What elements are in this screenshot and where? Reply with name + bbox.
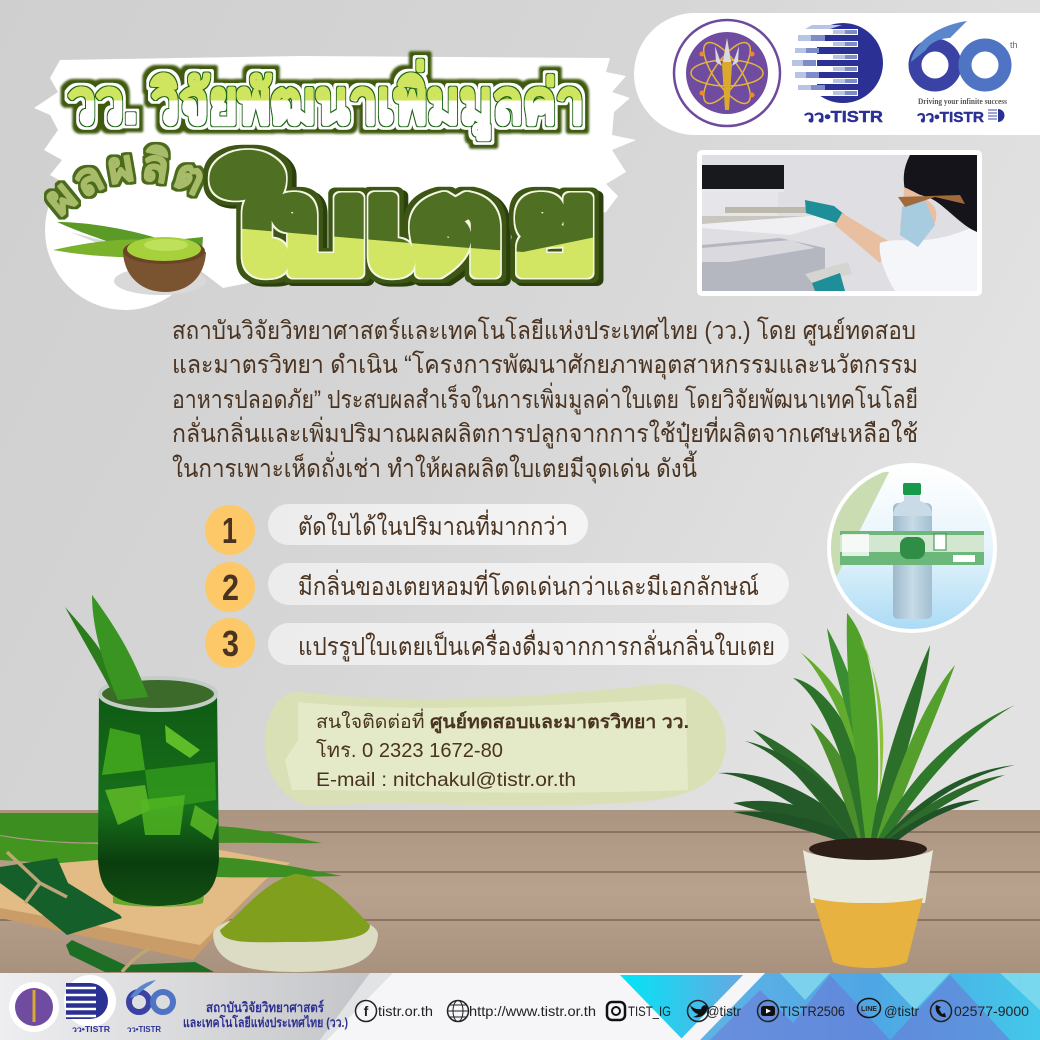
footer bar bbox=[0, 973, 1040, 1040]
list item 1 bbox=[205, 504, 588, 555]
logo: TISTR: วว•TISTR bbox=[804, 109, 883, 126]
logo: 60th anniversary bbox=[911, 21, 1018, 126]
bowl of pandan powder bbox=[213, 874, 378, 972]
wooden table bbox=[0, 810, 1040, 973]
footer contact items bbox=[356, 998, 1029, 1022]
footer bar: วว•TISTR bbox=[127, 1025, 161, 1034]
body paragraph: สถาบันวิจัยวิทยาศาสตร์และเทคโนโลยีแห่งประเทศไทย (วว.) โดย ศูนย์ทดสอบ bbox=[172, 316, 916, 346]
logo: TISTR bbox=[790, 20, 883, 126]
body paragraph: ในการเพาะเห็ดถั่งเช่า ทำให้ผลผลิตใบเตยมีจุดเด่น ดังนี้ bbox=[172, 450, 697, 484]
contact panel: E-mail : nitchakul@tistr.or.th bbox=[316, 770, 576, 791]
white circle behind product illustration bbox=[45, 150, 205, 310]
body paragraph: กลั่นกลิ่นและเพิ่มปริมาณผลผลิตการปลูกจากการใช้ปุ๋ยที่ผลิตจากเศษเหลือใช้ bbox=[172, 416, 918, 449]
pot bbox=[803, 850, 933, 903]
table leaves behind glass bbox=[0, 813, 322, 864]
footer logos bbox=[9, 982, 59, 1032]
list item 3: แปรรูปใบเตยเป็นเครื่องดื่มจากการกลั่นกลิ่นใบเตย bbox=[298, 629, 775, 662]
list item 1: ตัดใบได้ในปริมาณที่มากกว่า bbox=[298, 509, 568, 541]
footer contact items: @tistr bbox=[884, 1003, 919, 1019]
footer bar: และเทคโนโลยีแห่งประเทศไทย (วว.) bbox=[183, 1014, 348, 1030]
curved label: ผลผลิต: ผลผลิต bbox=[44, 142, 204, 220]
pandan leaves bbox=[718, 613, 1015, 847]
body paragraph: และมาตรวิทยา ดำเนิน “โครงการพัฒนาศักยภาพอุตสาหกรรมและนวัตกรรม bbox=[172, 350, 918, 380]
pandan leaves in glass bbox=[65, 595, 148, 700]
footer contact items: LINE bbox=[861, 1006, 877, 1013]
list item 2 bbox=[205, 562, 789, 612]
footer contact items: TIST_IG bbox=[628, 1003, 671, 1019]
footer contact items: TISTR2506 bbox=[780, 1003, 845, 1019]
body paragraph bbox=[172, 316, 918, 484]
footer contact items: http://www.tistr.or.th bbox=[469, 1003, 596, 1019]
cutting board bbox=[0, 850, 290, 960]
footer contact items: 02577-9000 bbox=[954, 1003, 1029, 1019]
list item 2: มีกลิ่นของเตยหอมที่โดดเด่นกว่าและมีเอกลักษณ์ bbox=[298, 569, 759, 601]
logo: 60th anniversary: วว•TISTR bbox=[917, 109, 984, 126]
glass of pandan drink bbox=[98, 678, 219, 907]
background wall bbox=[0, 0, 1040, 812]
logo: 60th anniversary: Driving your infinite success bbox=[918, 97, 1007, 106]
title line: วว. วิจัยพัฒนาเพิ่มมูลค่า: วว. วิจัยพัฒนาเพิ่มมูลค่า bbox=[68, 60, 584, 140]
leaf on board bbox=[215, 857, 342, 877]
logo: 60th anniversary: th bbox=[1010, 40, 1018, 50]
footer contact items: tistr.or.th bbox=[378, 1003, 433, 1019]
plant: pandan in pot bbox=[718, 613, 1015, 968]
list item 1: 1 bbox=[222, 510, 237, 551]
bottle product circle bbox=[827, 463, 997, 633]
footer bar: วว•TISTR bbox=[72, 1025, 110, 1034]
footer contact items: f bbox=[364, 1003, 369, 1019]
list item 3: 3 bbox=[222, 623, 239, 664]
illustration: pandan leaves and bowl bbox=[53, 222, 206, 295]
logo panel bbox=[634, 13, 1040, 135]
contact panel bbox=[265, 684, 726, 806]
big title: ใบเตย: ใบเตย bbox=[214, 155, 596, 297]
photo: scientist in laboratory bbox=[697, 150, 982, 296]
contact panel: สนใจติดต่อที่ ศูนย์ทดสอบและมาตรวิทยา วว. bbox=[316, 708, 689, 734]
list item 2: 2 bbox=[222, 567, 239, 608]
wrapped pandan parcels bbox=[0, 852, 214, 972]
footer contact items: @tistr bbox=[706, 1003, 741, 1019]
list item 3 bbox=[205, 618, 789, 668]
logo: ministry seal bbox=[674, 20, 780, 126]
footer organisation name: สถาบันวิจัยวิทยาศาสตร์ bbox=[206, 999, 325, 1015]
body paragraph: อาหารปลอดภัย” ประสบผลสำเร็จในการเพิ่มมูลค่าใบเตย โดยวิจัยพัฒนาเทคโนโลยี bbox=[172, 382, 918, 415]
white brush stroke behind title bbox=[34, 56, 636, 288]
contact panel: โทร. 0 2323 1672-80 bbox=[316, 739, 503, 762]
